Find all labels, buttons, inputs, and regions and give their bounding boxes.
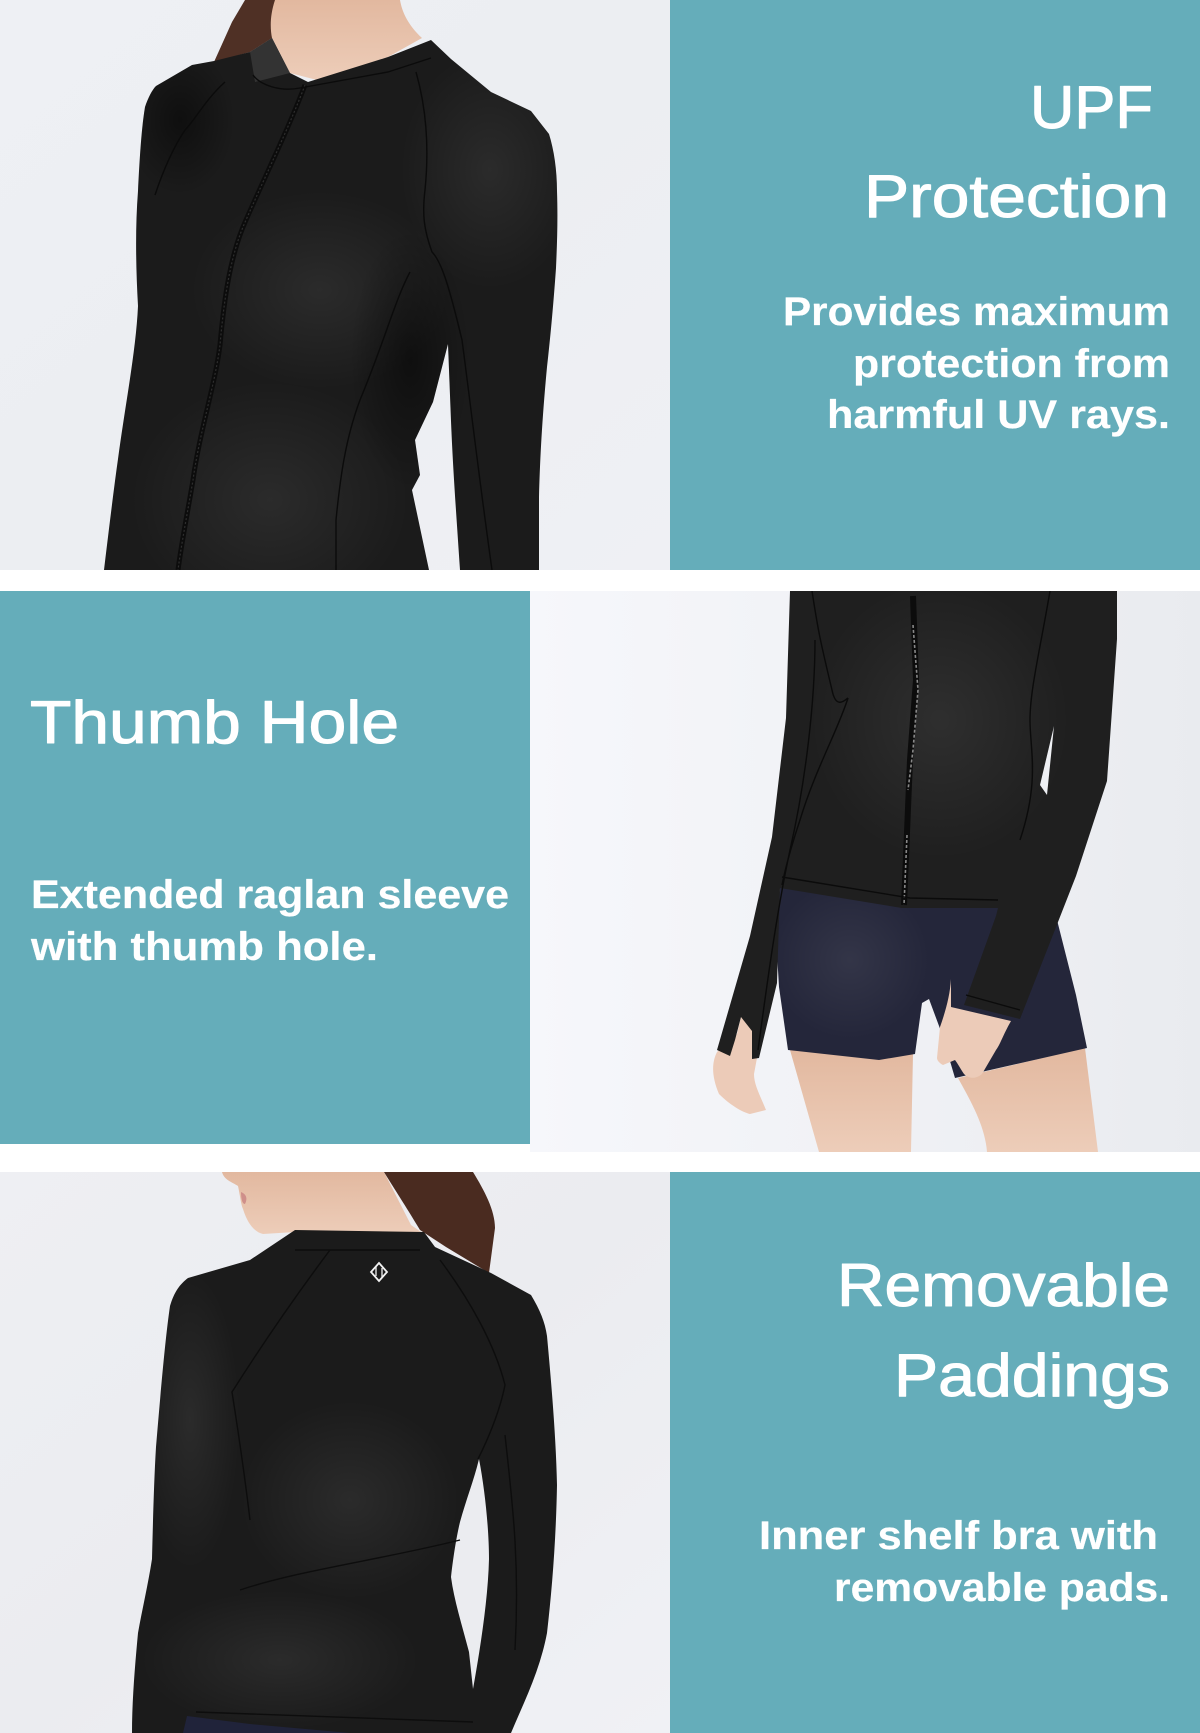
neck <box>271 0 422 80</box>
panel: removable paddings text <box>670 1172 1200 1733</box>
hands <box>713 1017 766 1114</box>
arm gap <box>1040 726 1054 795</box>
seams <box>758 591 1050 1050</box>
heading: Thumb Hole: Thumb Hole <box>30 689 399 756</box>
legs <box>790 1050 913 1152</box>
description: with thumb hole. <box>30 925 378 969</box>
hair <box>214 0 277 62</box>
description: removable pads. <box>834 1566 1170 1610</box>
description <box>30 873 509 969</box>
panel: removable paddings photo <box>0 1172 670 1733</box>
description: harmful UV rays. <box>827 393 1170 437</box>
panel: thumb hole text <box>0 591 530 1144</box>
zipper <box>904 596 916 905</box>
heading: Removable Paddings: Paddings <box>894 1342 1170 1409</box>
description <box>759 1514 1170 1610</box>
jacket, full front <box>717 580 1117 1059</box>
heading: UPF Protection <box>864 74 1169 230</box>
description: Provides maximum <box>783 290 1170 334</box>
icon: brand logo <box>371 1263 387 1281</box>
description: Inner shelf bra with <box>759 1514 1158 1558</box>
seams <box>196 1250 517 1722</box>
panel: UPF protection photo <box>0 0 670 620</box>
hair <box>384 1172 495 1273</box>
gap between arm and torso <box>451 1459 489 1689</box>
description: protection from <box>853 342 1170 386</box>
heading: UPF Protection: Protection <box>864 163 1169 230</box>
heading: UPF Protection: UPF <box>1030 74 1153 141</box>
description <box>783 290 1170 437</box>
heading: Removable Paddings: Removable <box>837 1252 1170 1319</box>
panel: UPF protection text <box>670 0 1200 570</box>
description: Extended raglan sleeve <box>31 873 509 917</box>
zipper <box>178 85 305 570</box>
back of shirt <box>132 1230 557 1733</box>
heading: Removable Paddings <box>837 1252 1170 1409</box>
panel: thumb hole photo <box>530 580 1200 1152</box>
shorts <box>776 886 1087 1078</box>
seams <box>155 58 492 570</box>
shorts <box>183 1716 350 1733</box>
face and neck <box>222 1172 424 1234</box>
jacket, front zip <box>104 38 558 570</box>
